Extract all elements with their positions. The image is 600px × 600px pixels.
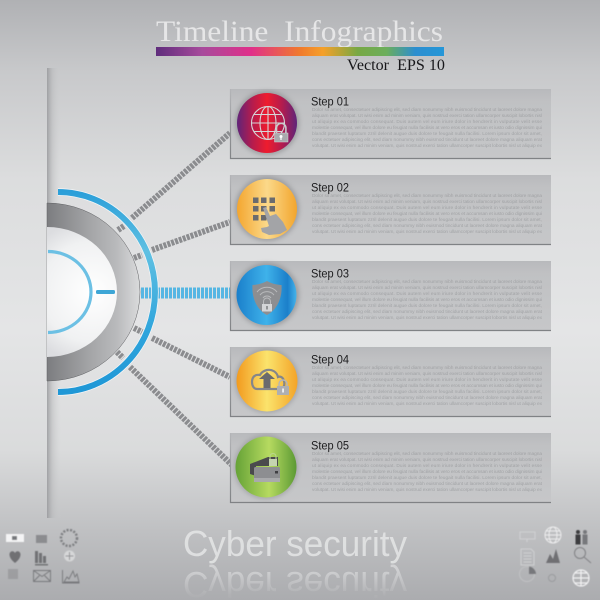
body text: volutpat. Ut wisi enim ad minim veniam, quis nostrud exerci tation ullamcorper suscipit lobortis nisl ut aliquip ex xyxy=(312,143,543,149)
body text: blandit praesent luptatum zzril delenit augue duis dolore te feugait nulla facilisi. Lorem ipsum dolor sit amet, xyxy=(312,303,542,309)
panel: step 03 xyxy=(230,261,551,331)
body text: Dolor sit amet, consectetuer adipiscing elit, sed diam nonummy nibh euismod tincidunt ut laoreet dolore magna xyxy=(312,107,542,113)
connector lines xyxy=(117,133,232,465)
badge shadow xyxy=(235,349,299,413)
icon: globe euro xyxy=(573,570,589,586)
body text: aliquam erat volutpat. Ut wisi enim ad minim veniam, quis nostrud exerci tation ullamcorper suscipit lobortis nisl xyxy=(312,113,542,119)
icon group: bottom left xyxy=(6,530,80,583)
gray ring xyxy=(47,203,140,381)
body text: aliquam erat volutpat. Ut wisi enim ad minim veniam, quis nostrud exerci tation ullamcorper suscipit lobortis nisl xyxy=(312,285,542,291)
body text: ut aliquip ex ea commodo consequat. Duis autem vel eum iriure dolor in hendrerit in vulputate velit esse xyxy=(312,119,542,125)
body text: volutpat. Ut wisi enim ad minim veniam, quis nostrud exerci tation ullamcorper suscipit lobortis nisl ut aliquip ex xyxy=(312,315,543,321)
body text: Dolor sit amet, consectetuer adipiscing elit, sed diam nonummy nibh euismod tincidunt ut laoreet dolore magna xyxy=(312,279,542,285)
central semicircle hub xyxy=(47,192,155,392)
panel: step 04 xyxy=(230,347,551,417)
body text: cons ectetuer adipiscing elit, sed diam nonummy nibh euismod tincidunt ut laoreet dolore magna aliquam erat xyxy=(312,223,543,229)
body text: blandit praesent luptatum zzril delenit augue duis dolore te feugait nulla facilisi. Lorem ipsum dolor sit amet, xyxy=(312,217,542,223)
title: Timeline Infographics xyxy=(156,15,443,48)
icon: magnifier xyxy=(574,548,591,563)
rainbow bar xyxy=(156,47,444,56)
cyber security heading: Cyber security xyxy=(183,523,408,564)
icon: monitor xyxy=(520,532,535,542)
panel background xyxy=(230,89,551,159)
icon: heart xyxy=(10,551,20,563)
body text: volutpat. Ut wisi enim ad minim veniam, quis nostrud exerci tation ullamcorper suscipit lobortis nisl ut aliquip ex xyxy=(312,487,543,493)
green badge xyxy=(236,436,296,498)
icon: bar chart xyxy=(35,551,48,566)
red badge xyxy=(237,93,297,153)
body text: ut aliquip ex ea commodo consequat. Duis autem vel eum iriure dolor in hendrerit in vulputate velit esse xyxy=(312,377,542,383)
cyber security heading xyxy=(183,523,408,600)
panel background xyxy=(230,433,551,503)
body text: molestie consequat, vel illum dolore eu feugiat nulla facilisis at vero eros et accumsan et iusto odio dignissim qui xyxy=(312,125,542,131)
icon: cloud upload with padlock xyxy=(252,370,289,395)
body text: volutpat. Ut wisi enim ad minim veniam, quis nostrud exerci tation ullamcorper suscipit lobortis nisl ut aliquip ex xyxy=(312,401,543,407)
panel background xyxy=(230,347,551,417)
icon: people xyxy=(576,530,580,544)
body text: blandit praesent luptatum zzril delenit augue duis dolore te feugait nulla facilisi. Lorem ipsum dolor sit amet, xyxy=(312,131,542,137)
icon: pie chart xyxy=(520,566,534,582)
body text: molestie consequat, vel illum dolore eu feugiat nulla facilisis at vero eros et accumsan et iusto odio dignissim qui xyxy=(312,297,542,303)
panel: step 01 xyxy=(230,89,551,159)
body text xyxy=(312,193,543,235)
vertical rail xyxy=(47,68,61,518)
body text: blandit praesent luptatum zzril delenit augue duis dolore te feugait nulla facilisi. Lorem ipsum dolor sit amet, xyxy=(312,475,542,481)
badge shadow xyxy=(234,435,298,499)
outer blue arc xyxy=(58,192,155,392)
badge shadow xyxy=(235,263,299,327)
body text xyxy=(312,365,543,407)
icon group: bottom right xyxy=(520,527,591,586)
body text: ut aliquip ex ea commodo consequat. Duis autem vel eum iriure dolor in hendrerit in vulputate velit esse xyxy=(312,463,542,469)
badge shadow xyxy=(235,91,299,155)
icon: shield with wifi and lock xyxy=(252,281,282,315)
panel: step 02 xyxy=(230,175,551,245)
icon: cloud lock xyxy=(548,574,556,582)
orange badge xyxy=(237,179,297,239)
body text: cons ectetuer adipiscing elit, sed diam nonummy nibh euismod tincidunt ut laoreet dolore magna aliquam erat xyxy=(312,309,543,315)
body text: volutpat. Ut wisi enim ad minim veniam, quis nostrud exerci tation ullamcorper suscipit lobortis nisl ut aliquip ex xyxy=(312,229,543,235)
subtitle: Vector EPS 10 xyxy=(347,57,445,74)
panel background xyxy=(230,175,551,245)
icon: keypad xyxy=(8,569,18,579)
body text: Dolor sit amet, consectetuer adipiscing elit, sed diam nonummy nibh euismod tincidunt ut laoreet dolore magna xyxy=(312,193,542,199)
icon: mountain chart xyxy=(546,549,560,563)
body text xyxy=(312,107,543,149)
icon: document xyxy=(521,549,534,565)
body text: molestie consequat, vel illum dolore eu feugiat nulla facilisis at vero eros et accumsan et iusto odio dignissim qui xyxy=(312,469,542,475)
icon: envelope xyxy=(34,570,50,582)
body text xyxy=(312,451,543,493)
heading: Step 01 xyxy=(311,96,349,108)
icon: globe with padlock xyxy=(252,106,288,142)
icon: area chart xyxy=(62,570,80,583)
body text: molestie consequat, vel illum dolore eu feugiat nulla facilisis at vero eros et accumsan et iusto odio dignissim qui xyxy=(312,211,542,217)
body text: cons ectetuer adipiscing elit, sed diam nonummy nibh euismod tincidunt ut laoreet dolore magna aliquam erat xyxy=(312,395,543,401)
body text: aliquam erat volutpat. Ut wisi enim ad minim veniam, quis nostrud exerci tation ullamcorper suscipit lobortis nisl xyxy=(312,199,542,205)
small blue ring xyxy=(48,252,91,332)
icon: keypad with hand xyxy=(253,198,287,235)
body text xyxy=(312,279,543,321)
body text: aliquam erat volutpat. Ut wisi enim ad minim veniam, quis nostrud exerci tation ullamcorper suscipit lobortis nisl xyxy=(312,371,542,377)
body text: Dolor sit amet, consectetuer adipiscing elit, sed diam nonummy nibh euismod tincidunt ut laoreet dolore magna xyxy=(312,451,542,457)
yellow badge xyxy=(236,350,298,412)
blue badge xyxy=(236,265,296,325)
icon: white card xyxy=(6,534,24,542)
heading: Step 05 xyxy=(311,440,349,452)
body text: molestie consequat, vel illum dolore eu feugiat nulla facilisis at vero eros et accumsan et iusto odio dignissim qui xyxy=(312,383,542,389)
body text: Dolor sit amet, consectetuer adipiscing elit, sed diam nonummy nibh euismod tincidunt ut laoreet dolore magna xyxy=(312,365,542,371)
center tick xyxy=(96,290,115,294)
heading: Step 04 xyxy=(311,354,350,366)
body text: ut aliquip ex ea commodo consequat. Duis autem vel eum iriure dolor in hendrerit in vulputate velit esse xyxy=(312,291,542,297)
icon: gear xyxy=(61,530,77,546)
panel background xyxy=(230,261,551,331)
icon: globe xyxy=(545,527,561,543)
body text: aliquam erat volutpat. Ut wisi enim ad minim veniam, quis nostrud exerci tation ullamcorper suscipit lobortis nisl xyxy=(312,457,542,463)
icon: small monitor xyxy=(36,535,47,543)
white inner disc xyxy=(47,227,117,357)
heading: Step 02 xyxy=(311,182,349,194)
icon: plus dial xyxy=(64,550,75,562)
badge shadow xyxy=(235,177,299,241)
heading: Step 03 xyxy=(311,268,349,280)
body text: cons ectetuer adipiscing elit, sed diam nonummy nibh euismod tincidunt ut laoreet dolore magna aliquam erat xyxy=(312,481,543,487)
panel: step 05 xyxy=(230,433,551,503)
body text: ut aliquip ex ea commodo consequat. Duis autem vel eum iriure dolor in hendrerit in vulputate velit esse xyxy=(312,205,542,211)
body text: blandit praesent luptatum zzril delenit augue duis dolore te feugait nulla facilisi. Lorem ipsum dolor sit amet, xyxy=(312,389,542,395)
icon: credit cards with padlock xyxy=(250,454,280,482)
body text: cons ectetuer adipiscing elit, sed diam nonummy nibh euismod tincidunt ut laoreet dolore magna aliquam erat xyxy=(312,137,543,143)
